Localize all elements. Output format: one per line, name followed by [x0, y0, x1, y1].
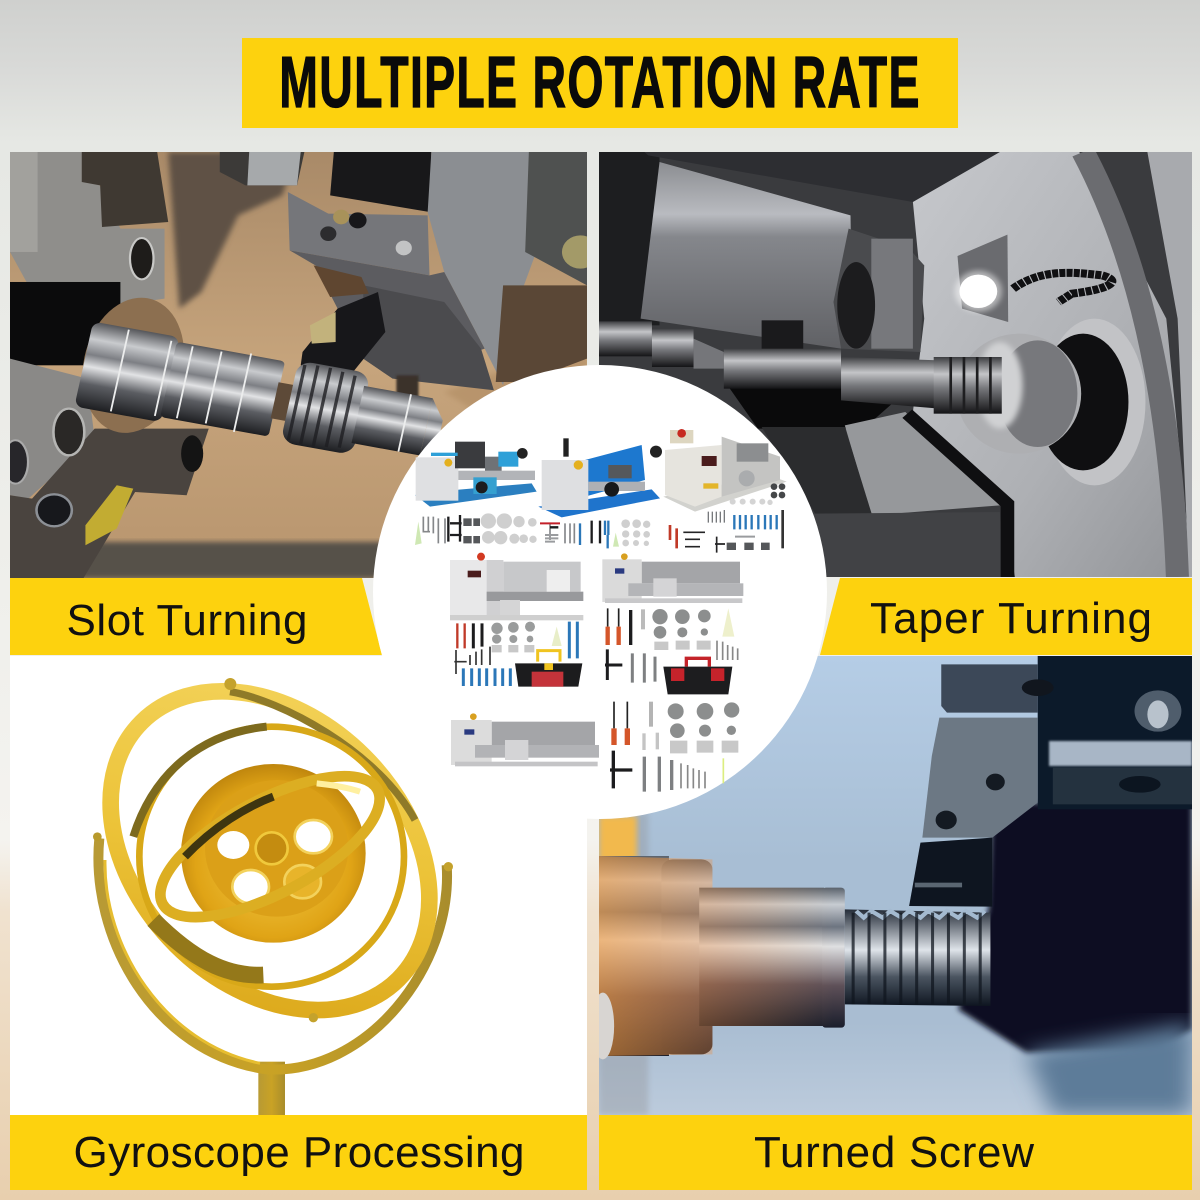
label: taper turning: Taper Turning [870, 594, 1152, 643]
panel: slot turning photo [10, 152, 587, 578]
label: slot turning [10, 578, 382, 655]
turret and tool holder [220, 152, 599, 405]
left jaw blocks [3, 152, 209, 578]
turned workpiece [70, 290, 450, 471]
product: silver lathe 1 [450, 553, 583, 620]
main plate [913, 152, 1192, 577]
label: gyroscope processing [10, 1115, 587, 1190]
label: gyroscope processing: Gyroscope Processing [74, 1128, 524, 1177]
dark machine mass [909, 656, 1192, 1115]
product: blue lathe [538, 438, 662, 517]
accessories: lower tool set [610, 702, 739, 792]
label: turned screw [599, 1115, 1192, 1190]
panel: turned screw photo [599, 656, 1192, 1115]
accessories row [415, 483, 785, 553]
turret [762, 229, 924, 352]
guard panel [641, 162, 852, 349]
accessories: tools with red toolbox [605, 608, 738, 694]
label: slot turning: Slot Turning [66, 596, 308, 645]
center product collage [415, 429, 786, 792]
product: white lathe [663, 429, 787, 512]
title banner: MULTIPLE ROTATION RATE [279, 42, 921, 122]
spindle and chuck [599, 319, 1145, 485]
label: turned screw: Turned Screw [754, 1128, 1034, 1177]
accessories: tools with yellow toolbox [454, 622, 582, 687]
label: taper turning [820, 578, 1192, 655]
threaded screw workpiece [591, 813, 990, 1115]
icon: gold gyroscope [93, 678, 453, 1115]
product: silver lathe 2 [602, 553, 743, 603]
center product circle [373, 365, 827, 819]
panel: gyroscope photo [10, 628, 587, 1115]
lower tray [728, 385, 1007, 577]
panel: taper turning photo [599, 152, 1192, 577]
product: silver lathe 3 [451, 713, 599, 766]
work light and coolant hose [955, 235, 1112, 322]
product: blue mini lathe [415, 442, 537, 507]
